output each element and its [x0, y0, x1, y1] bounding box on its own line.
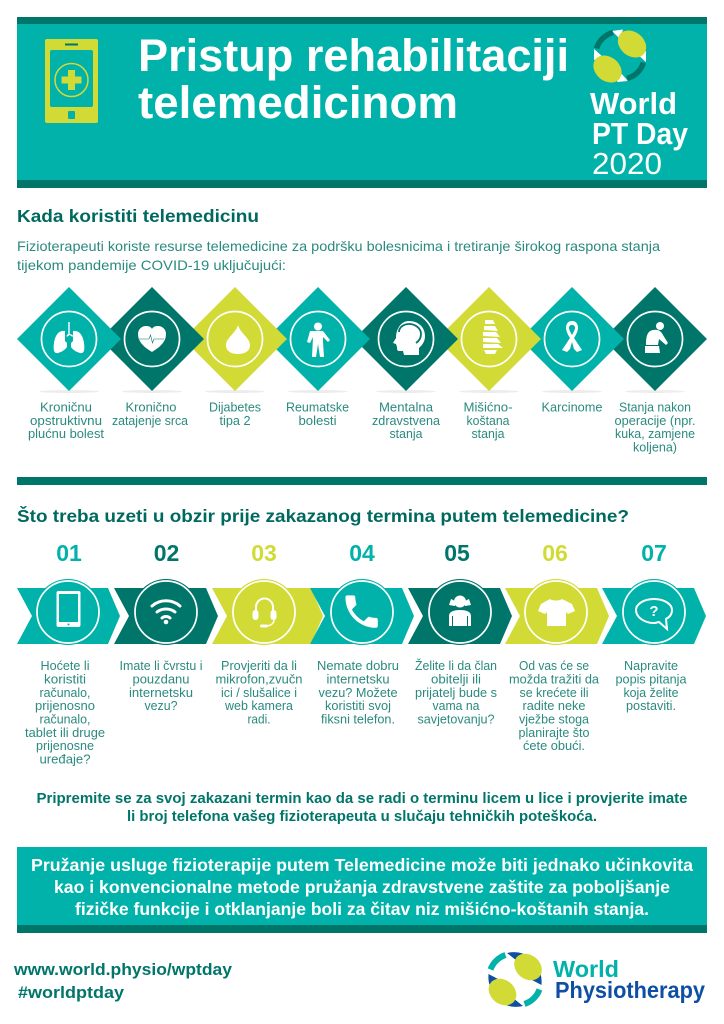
condition: cancer — [520, 287, 624, 414]
panel: seven steps — [17, 540, 706, 766]
condition: COPD: plućnu bolest — [28, 426, 104, 441]
step 07 — [602, 540, 706, 713]
step 06: ćete obući. — [523, 738, 585, 753]
World Physiotherapy logo: World — [553, 956, 619, 982]
condition: after surgery: operacije (npr. — [614, 413, 696, 428]
title: telemedicinom — [138, 77, 458, 128]
condition: type 2 diabetes — [183, 287, 287, 428]
World Physiotherapy logo: Physiotherapy — [555, 977, 705, 1003]
step 03: ici / slušalice i — [221, 685, 297, 700]
heading: what to consider: Što treba uzeti u obzir prije zakazanog termina putem telemedicine? — [17, 505, 629, 526]
step 01: računalo, — [40, 712, 90, 726]
step 05: Želite li da član — [415, 658, 497, 673]
condition: cancer: Karcinome — [542, 400, 602, 414]
step 04: 04 — [349, 540, 375, 566]
step 04: Nemate dobru — [317, 658, 399, 673]
preparation note: li broj telefona vašeg fizioterapeuta u slučaju tehničkih poteškoća. — [127, 809, 597, 825]
step 07: koja želite — [624, 685, 678, 700]
footer links: #worldptday — [18, 984, 125, 1002]
step 01 — [17, 540, 120, 766]
step 07: popis pitanja — [616, 672, 687, 686]
icon: smartphone with medical cross — [45, 39, 98, 123]
preparation note — [36, 791, 688, 825]
step 01: uređaje? — [40, 752, 90, 766]
condition: mental health — [354, 287, 458, 441]
condition: mental health: stanja — [390, 426, 423, 441]
condition: heart failure: zatajenje srca — [112, 413, 189, 428]
callout banner: kao i konvencionalne metode pružanja zdravstvene zaštite za poboljšanje — [54, 877, 670, 897]
step 06: 06 — [542, 540, 568, 566]
condition: type 2 diabetes: Dijabetes — [209, 400, 261, 414]
step 03: web kamera — [224, 698, 294, 713]
condition: heart failure — [100, 287, 204, 428]
condition: musculoskeletal: Mišićno- — [464, 400, 512, 414]
condition: rheumatic diseases: Reumatske — [286, 400, 349, 414]
step 07: Napravite — [624, 658, 678, 673]
condition: after surgery — [603, 287, 707, 454]
step 06: radite neke — [522, 698, 586, 713]
step 06: planirajte što — [518, 725, 590, 740]
step 05: 05 — [444, 540, 470, 566]
step 03: mikrofon,zvučn — [216, 672, 302, 686]
step 03 — [212, 540, 323, 726]
step 05: savjetovanju? — [418, 712, 494, 726]
callout banner: fizičke funkcije i otklanjanje boli za čitav niz mišićno-koštanih stanja. — [75, 899, 649, 919]
step 01: 01 — [56, 540, 82, 566]
heading: when to use telemedicine: Kada koristiti telemedicinu — [17, 206, 259, 226]
callout banner — [17, 847, 707, 933]
step 04: koristiti svoj — [325, 698, 391, 713]
step 06: možda tražiti da — [509, 672, 600, 686]
condition: rheumatic diseases: bolesti — [298, 413, 337, 428]
condition: type 2 diabetes: tipa 2 — [220, 413, 250, 428]
callout banner: Pružanje usluge fizioterapije putem Telemedicine može biti jednako učinkovita — [31, 855, 693, 875]
World PT Day 2020 logo: World — [590, 86, 677, 121]
condition: musculoskeletal: stanja — [472, 426, 505, 441]
step 04 — [310, 540, 414, 726]
step 02: Imate li čvrstu i — [120, 658, 203, 673]
step 02 — [114, 540, 218, 713]
intro paragraph: Fizioterapeuti koriste resurse telemedicine za podršku bolesnicima i tretiranje širokog raspona stanja — [17, 238, 660, 254]
step 05: vama na — [432, 698, 480, 713]
step 01: Hoćete li — [40, 658, 90, 673]
step 02: internetsku — [129, 685, 193, 700]
step 02: vezu? — [144, 698, 178, 713]
title — [138, 30, 569, 128]
step 02: 02 — [154, 540, 179, 566]
step 05: obitelji ili — [431, 672, 481, 686]
footer links: www.world.physio/wptday — [13, 961, 233, 979]
step 05: prijatelj bude s — [415, 685, 497, 700]
step 07: ? — [649, 603, 659, 620]
condition: after surgery: koljena) — [633, 440, 677, 454]
condition: heart failure: Kronično — [126, 400, 176, 414]
World PT Day 2020 logo: PT Day — [592, 116, 689, 151]
condition: COPD: Kroničnu — [40, 400, 92, 414]
step 06 — [505, 540, 609, 753]
step 04: internetsku — [326, 672, 390, 686]
condition: musculoskeletal — [437, 287, 541, 441]
intro paragraph: tijekom pandemije COVID-19 uključujući: — [17, 257, 286, 273]
step 06: se krećete ili — [520, 685, 589, 700]
step 01: koristiti — [44, 672, 86, 686]
step 01: tablet ili druge — [25, 725, 105, 740]
step 06: Od vas će se — [519, 658, 589, 673]
condition: mental health: zdravstvena — [372, 413, 441, 428]
step 01: prijenosno — [35, 698, 95, 713]
condition: mental health: Mentalna — [379, 400, 434, 414]
step 07: postaviti. — [626, 698, 676, 713]
diamond shadows — [39, 390, 685, 393]
World PT Day 2020 logo: 2020 — [592, 146, 662, 181]
step 01: prijenosne — [36, 738, 94, 753]
step 01: računalo, — [40, 685, 90, 700]
condition: after surgery: Stanja nakon — [619, 400, 691, 414]
condition: musculoskeletal: koštana — [466, 413, 510, 428]
header banner — [17, 17, 707, 188]
condition: after surgery: kuka, zamjene — [615, 426, 695, 441]
condition: COPD — [17, 287, 121, 441]
intro paragraph — [17, 238, 660, 273]
step 02: pouzdanu — [132, 672, 190, 686]
panel: conditions row — [17, 287, 707, 454]
preparation note: Pripremite se za svoj zakazani termin kao da se radi o terminu licem u lice i provjerite imate — [36, 791, 688, 807]
step 06: vježbe stoga — [519, 712, 590, 726]
World PT Day 2020 logo — [588, 25, 689, 181]
step 04: vezu? Možete — [318, 685, 398, 700]
step 05 — [408, 540, 512, 726]
step 03: radi. — [248, 712, 270, 726]
footer links — [13, 961, 233, 1002]
step 03: 03 — [251, 540, 277, 566]
step 04: fiksni telefon. — [321, 712, 395, 726]
step 03: Provjeriti da li — [221, 658, 297, 673]
step 07: 07 — [641, 540, 667, 566]
title: Pristup rehabilitaciji — [138, 30, 569, 81]
World Physiotherapy logo — [483, 948, 705, 1011]
condition: COPD: opstruktivnu — [30, 413, 102, 428]
condition: rheumatic diseases — [266, 287, 370, 428]
